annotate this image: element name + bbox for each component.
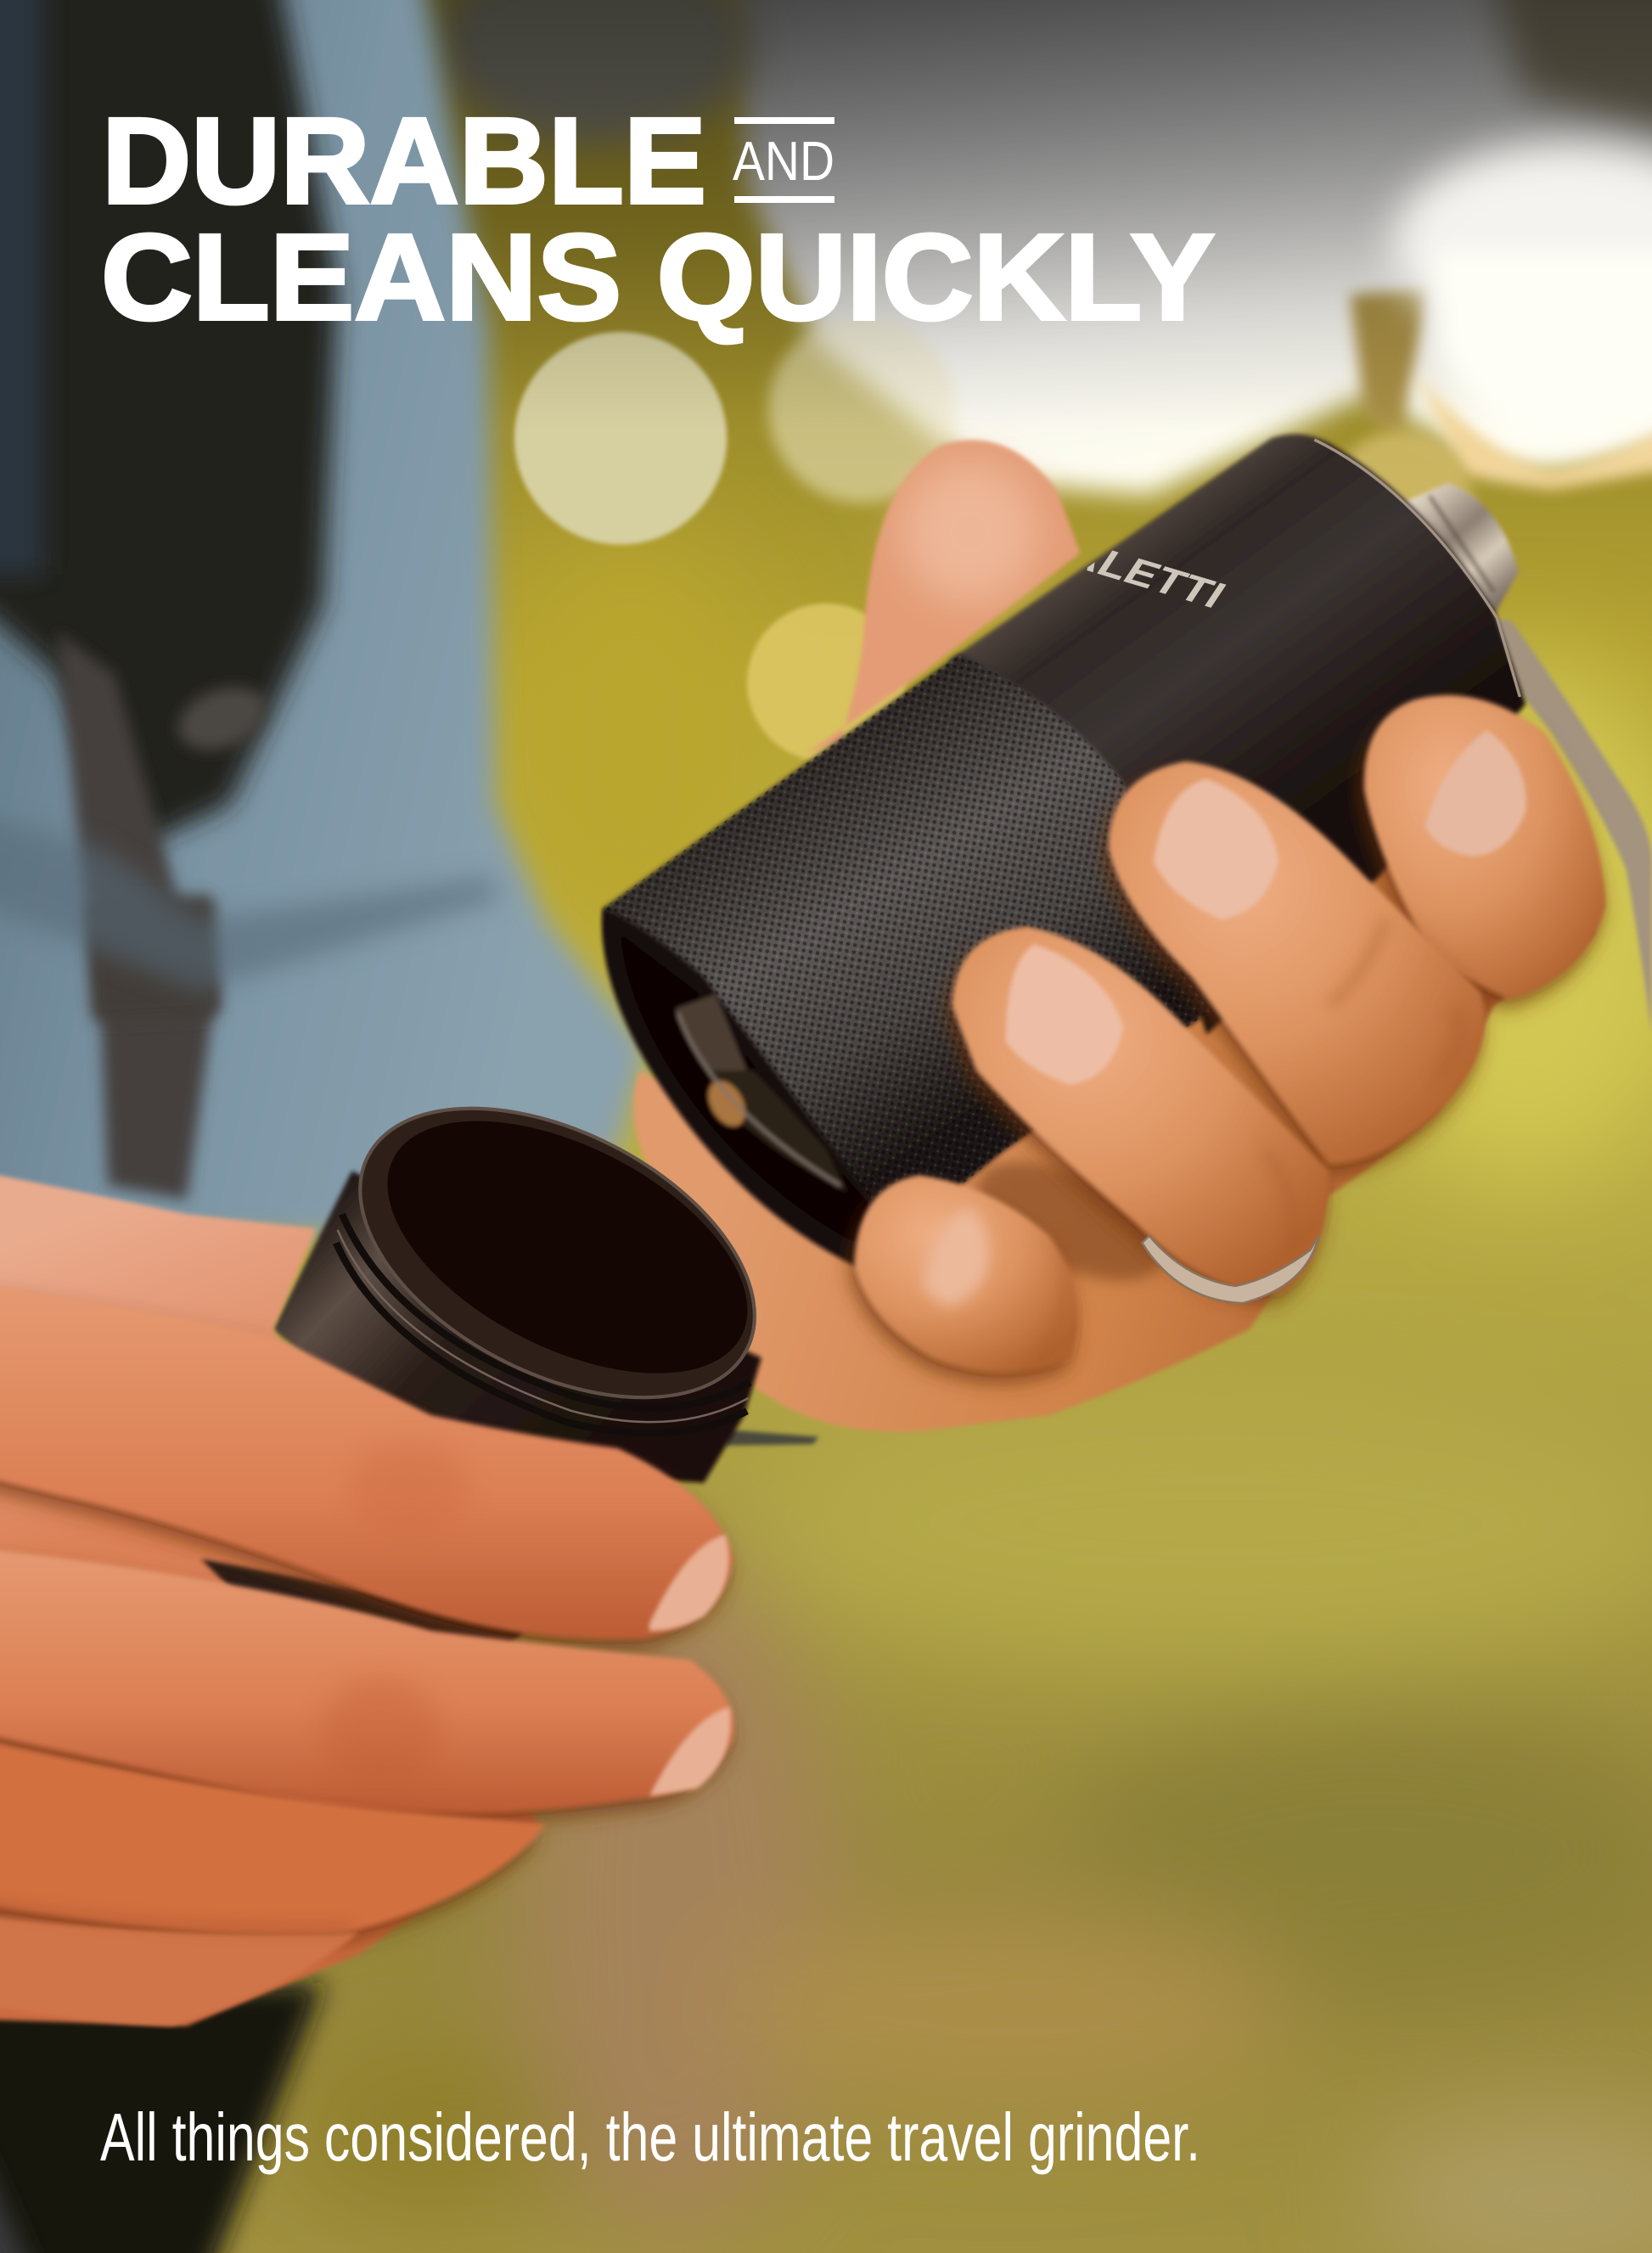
grinder (603, 434, 1652, 1267)
canister: threads (336, 1214, 750, 1433)
canister: rim (313, 1049, 801, 1457)
right hand: fingers (855, 695, 1606, 1372)
finger: little (1364, 695, 1606, 998)
right hand: rear fingertip (805, 440, 1081, 755)
canister: dark interior (348, 1069, 787, 1425)
title line two: CLEANS QUICKLY: CLEANS QUICKLY (101, 209, 1215, 346)
grinder: top knob (1402, 483, 1519, 615)
left hand (0, 1166, 733, 2026)
title connector: AND with rules (733, 117, 834, 203)
title line one: DURABLE: DURABLE (102, 93, 706, 229)
person: blue shirt, backpack strap (0, 0, 646, 2253)
left hand: middle finger (0, 1545, 733, 1813)
finger: middle with ring (952, 927, 1329, 1303)
grinder: handle arm (1494, 618, 1652, 1035)
left hand: back and wrist (0, 1166, 539, 2026)
left hand: ring finger (0, 1732, 546, 1934)
grinder: upper smooth body (948, 434, 1526, 1035)
grinder: brand mark: BIALETTI (1015, 520, 1233, 615)
finger: thumb (855, 1176, 1077, 1372)
blurred sky and bokeh (0, 0, 1652, 761)
left hand: lower shadow (201, 1559, 525, 1652)
title connector: AND with rules: AND (733, 130, 834, 192)
grinder: open burr end (603, 908, 879, 1267)
grinder: knurled grip (603, 654, 1230, 1264)
title (101, 93, 1215, 346)
right hand: palm behind grinder (633, 805, 1594, 1446)
left hand: index finger (0, 1278, 733, 1639)
tagline: All things considered, the ultimate travel grinder. (100, 2099, 1200, 2175)
finger: ring (1109, 761, 1485, 1164)
canister: grounds cup (273, 1049, 801, 1483)
canister: body (273, 1171, 761, 1483)
